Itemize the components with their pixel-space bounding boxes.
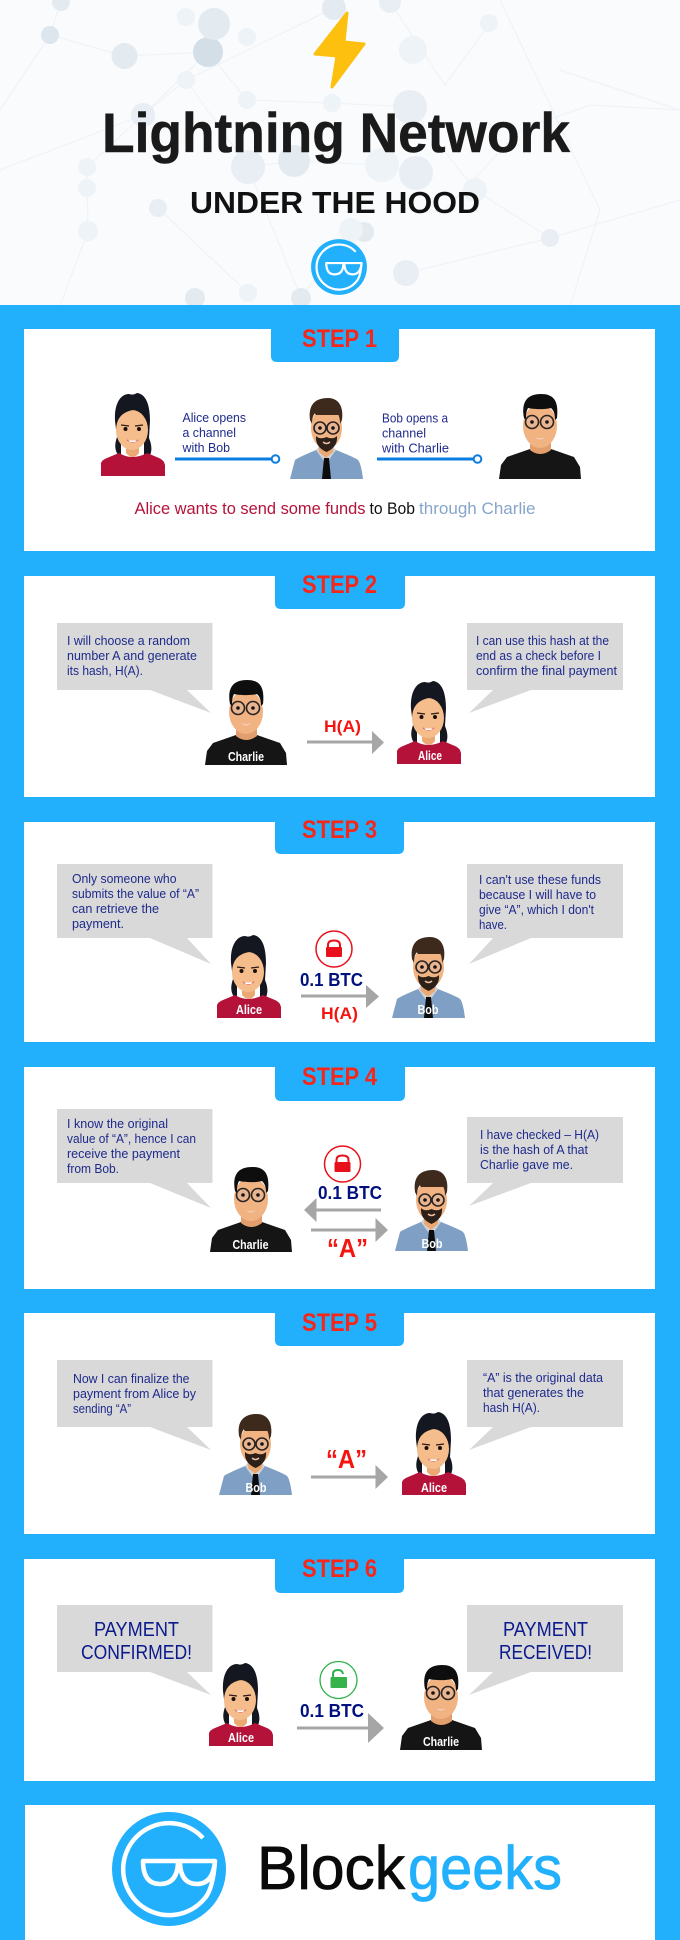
speech bubble: Bob: is the hash of A that [480,1142,588,1157]
text: Bob opens a channel [381,410,449,456]
speech bubble: Bob: Now I can finalize the [73,1371,190,1386]
arrow: right [311,1465,388,1489]
avatar: Alice: Alice [418,748,442,763]
avatar: Alice: Alice [228,1730,254,1745]
avatar: Charlie [205,680,287,765]
step 6 tab [275,1555,404,1593]
icon: closed red lock [316,931,352,967]
speech bubble: Alice: submits the value of “A” [72,886,199,901]
avatar: Bob [395,1170,468,1251]
speech bubble: Alice [57,864,212,964]
label: H(A): H(A) [321,1004,358,1023]
panel: step 3 [24,816,655,1042]
avatar: Charlie [499,394,581,479]
icon: open green lock [320,1662,357,1698]
subtitle: UNDER THE HOOD [190,185,480,220]
wordmark: geeks [408,1834,562,1902]
label: 0.1 BTC: 0.1 BTC [300,1701,364,1721]
channel line: Alice to Bob [175,455,279,463]
avatar: Alice: Alice [421,1480,447,1495]
avatar: Bob [219,1414,292,1495]
arrow: right [307,731,384,754]
icon: closed red lock [324,1146,360,1182]
label: quoted A: “A” [327,1233,368,1263]
avatar: Alice [217,935,281,1018]
arrow: right [311,1218,388,1242]
panel: step 6 [24,1555,655,1781]
avatar: Bob: Bob [246,1480,267,1495]
step 2 tab: STEP 2 [302,571,377,599]
arrow: left [304,1198,381,1222]
text: Alice opens a channel: Alice opens [182,410,246,425]
icon: header logo [311,239,367,295]
avatar: Bob [392,937,465,1018]
panel: step 5 [24,1309,655,1534]
avatar: Charlie [210,1167,292,1252]
step 1 tab [271,325,399,362]
panel: step 1 [24,325,655,551]
text: Alice opens a channel: a channel [182,425,236,440]
speech bubble: Alice [57,1605,212,1695]
speech bubble: Alice: payment. [72,916,124,931]
step 2 tab [275,571,405,609]
panel: Blockgeeks footer [25,1805,655,1940]
speech bubble: Alice [467,623,623,713]
channel line: Bob to Charlie [377,455,481,463]
step 3 tab [275,816,404,854]
speech bubble: Bob: give “A”, which I don't [479,902,594,917]
text: Alice opens a channel [182,410,246,455]
step 5 tab [275,1309,404,1346]
speech bubble: Bob [57,1360,212,1450]
title: Lightning Network [102,101,571,164]
text: Bob opens a channel: Bob opens a [382,410,449,426]
speech bubble: Alice: “A” is the original data [483,1370,604,1385]
icon: Blockgeeks logo [112,1812,226,1926]
text: Alice opens a channel: with Bob [182,440,230,455]
speech bubble: Bob: payment from Alice by [73,1386,196,1401]
wordmark [257,1834,562,1902]
speech bubble: Charlie [57,1109,212,1208]
step 3 tab: STEP 3 [302,816,377,844]
header background with network pattern [0,0,680,308]
speech bubble: Alice: PAYMENT [94,1619,179,1641]
step 6 tab: STEP 6 [302,1555,377,1583]
speech bubble: Alice: CONFIRMED! [81,1642,192,1664]
step 5 tab: STEP 5 [302,1309,377,1337]
summary sentence [134,500,536,518]
label: H(A): H(A) [324,717,361,736]
speech bubble: Bob: I have checked – H(A) [480,1127,599,1142]
avatar: Bob: Bob [418,1002,439,1017]
avatar: Charlie: Charlie [232,1237,268,1252]
avatar: Alice [402,1412,466,1495]
speech bubble: Bob [467,864,623,964]
avatar: Alice [101,393,165,476]
summary sentence: Alice wants to send some funds [134,500,366,518]
label: quoted A: “A” [326,1444,367,1474]
speech bubble: Alice: that generates the [483,1385,584,1400]
speech bubble: Alice: Only someone who [72,871,176,886]
speech bubble: Alice [467,1360,623,1450]
speech bubble: Charlie: number A and generate [67,648,197,663]
speech bubble: Charlie [57,623,212,713]
speech bubble: Charlie: from Bob. [67,1161,119,1176]
avatar: Charlie: Charlie [228,749,264,764]
avatar: Charlie: Charlie [423,1734,459,1749]
speech bubble: Charlie: PAYMENT [503,1619,588,1641]
avatar: Alice [209,1663,273,1746]
speech bubble: Alice: confirm the final payment [476,663,617,678]
speech bubble: Bob [467,1117,623,1206]
label: 0.1 BTC: 0.1 BTC [318,1183,382,1203]
avatar: Bob [290,398,363,479]
speech bubble: Alice: can retrieve the [72,901,159,916]
speech bubble: Alice: hash H(A). [483,1400,540,1415]
summary sentence: to Bob [370,500,415,518]
speech bubble: Bob: I can't use these funds [479,872,601,887]
speech bubble: Charlie: its hash, H(A). [67,663,143,678]
panel: step 4 [24,1063,655,1289]
avatar: Charlie [400,1665,482,1750]
speech bubble: Alice: I can use this hash at the [476,633,609,648]
speech bubble: Charlie: RECEIVED! [499,1642,592,1664]
avatar: Alice [397,681,461,764]
speech bubble: Charlie [467,1605,623,1695]
speech bubble: Bob: because I will have to [479,887,596,902]
step 4 tab: STEP 4 [302,1063,377,1091]
text: Bob opens a channel: channel [382,426,426,440]
text: Bob opens a channel: with Charlie [381,440,449,456]
label: 0.1 BTC: 0.1 BTC [300,970,363,990]
step 4 tab [275,1063,405,1101]
wordmark: Block [257,1834,405,1902]
speech bubble: Bob: have. [479,917,507,932]
speech bubble: Charlie: receive the payment [67,1146,180,1161]
speech bubble: Bob: Charlie gave me. [480,1157,573,1172]
speech bubble: Charlie: I know the original [67,1116,168,1131]
speech bubble: Charlie: I will choose a random [67,633,190,648]
arrow: right [301,985,379,1008]
speech bubble: Charlie: value of “A”, hence I can [67,1131,196,1146]
speech bubble: Bob: sending “A” [73,1401,131,1416]
speech bubble: Alice: end as a check before I [476,648,601,663]
panel: step 2 [24,571,655,797]
summary sentence: through Charlie [419,500,536,518]
icon: lightning bolt [315,13,364,87]
avatar: Bob: Bob [422,1236,443,1251]
avatar: Alice: Alice [236,1002,262,1017]
arrow: right [297,1713,384,1743]
step 1 tab: STEP 1 [302,325,377,353]
